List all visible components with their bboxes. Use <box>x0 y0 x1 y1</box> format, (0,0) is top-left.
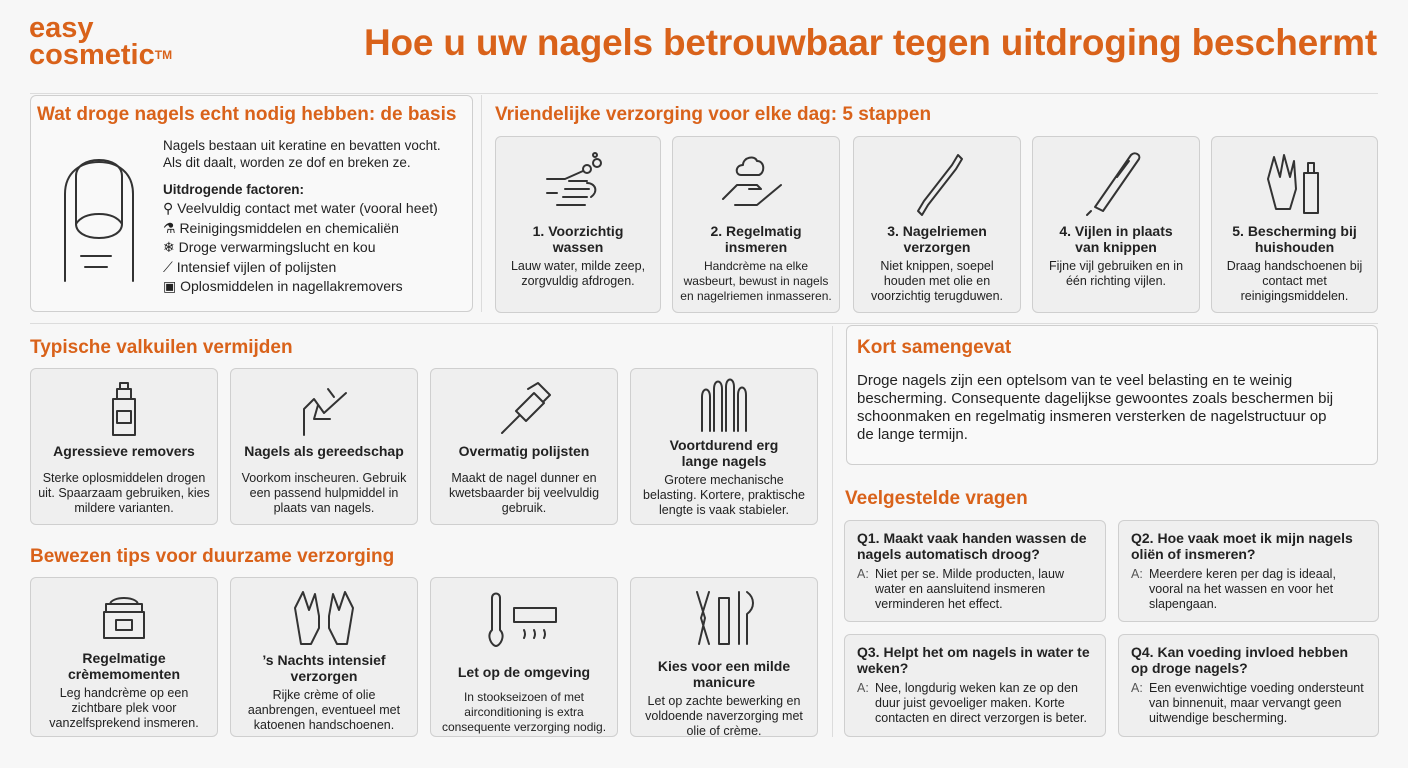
card: step 3 <box>853 136 1021 313</box>
card: step 1: wassen <box>553 239 603 255</box>
card: step 4: van knippen <box>1075 239 1157 255</box>
card: gereedschap: Voorkom inscheuren. Gebruik een passend hulpmiddel in plaats van nagels. <box>242 471 406 515</box>
text: basis: ❄ Droge verwarmingslucht en kou <box>163 239 376 255</box>
card: removers <box>30 368 218 525</box>
text: basis: Uitdrogende factoren: <box>163 182 304 197</box>
card: step 1: 1. Voorzichtig <box>533 223 623 239</box>
heading: 5 stappen: Vriendelijke verzorging voor elke dag: 5 stappen <box>495 104 931 125</box>
card: step 5: huishouden <box>1255 239 1334 255</box>
text: basis <box>163 138 441 294</box>
card: step 1: Lauw water, milde zeep, zorgvuldig afdrogen. <box>511 259 645 288</box>
card: crèmemomenten: Regelmatige <box>82 650 166 666</box>
logo: easy <box>29 12 94 44</box>
card: step 3: 3. Nagelriemen <box>887 223 987 239</box>
card: lange nagels: lange nagels <box>682 453 766 469</box>
faq: Q4: Een evenwichtige voeding ondersteunt van binnenuit, maar vervangt geen uitwendige bescherming. <box>1149 681 1364 725</box>
card: crèmemomenten: crèmemomenten <box>68 666 180 682</box>
faq: Q1: Niet per se. Milde producten, lauw water en aansluitend insmeren verminderen het effect. <box>875 567 1064 611</box>
card: step 3: verzorgen <box>904 239 970 255</box>
text: basis: ▣ Oplosmiddelen in nagellakremovers <box>163 278 403 294</box>
heading: tips: Bewezen tips voor duurzame verzorging <box>30 546 394 567</box>
text: basis: ⚗ Reinigingsmiddelen en chemicaliën <box>163 220 399 236</box>
faq: Q3: Q3. Helpt het om nagels in water te weken? <box>857 644 1090 676</box>
card: polijsten: Maakt de nagel dunner en kwetsbaarder bij veelvuldig gebruik. <box>449 471 599 515</box>
heading: basis: Wat droge nagels echt nodig hebben: de basis <box>37 104 456 125</box>
card: step 2 <box>672 136 840 313</box>
panel: basis <box>30 95 473 312</box>
text: basis: Nagels bestaan uit keratine en bevatten vocht. <box>163 138 441 153</box>
title: Hoe u uw nagels betrouwbaar tegen uitdroging beschermt <box>364 22 1377 63</box>
card: manicure: Let op zachte bewerking en voldoende naverzorging met olie of crème. <box>645 694 803 738</box>
text: samenvatting: Droge nagels zijn een optelsom van te veel belasting en te weinig bescherming. Consequente dagelijkse gewoontes zoals beschermen bij schoonmaken en regelmatig insmeren versterken de nagelstructuur op de lange termijn. <box>857 372 1333 443</box>
card: lange nagels: Voortdurend erg <box>670 437 778 453</box>
card: crèmemomenten: Leg handcrème op een zichtbare plek voor vanzelfsprekend insmeren. <box>49 686 199 730</box>
card: lange nagels: Grotere mechanische belasting. Kortere, praktische lengte is vaak stabieler. <box>643 473 805 517</box>
card: manicure: manicure <box>693 674 755 690</box>
faq: Q1: Q1. Maakt vaak handen wassen de nagels automatisch droog? <box>857 530 1087 562</box>
faq: Q3: A: <box>857 681 869 695</box>
card: omgeving: In stookseizoen of met airconditioning is extra consequente verzorging nodig. <box>442 690 606 734</box>
card: step 4: Fijne vijl gebruiken en in één richting vijlen. <box>1049 259 1183 288</box>
card: step 3: Niet knippen, soepel houden met olie en voorzichtig terugduwen. <box>871 259 1003 303</box>
card: removers: Agressieve removers <box>53 443 195 459</box>
card: polijsten: Overmatig polijsten <box>459 443 589 459</box>
card: omgeving: Let op de omgeving <box>458 664 590 680</box>
text: basis: Als dit daalt, worden ze dof en breken ze. <box>163 155 411 170</box>
heading: valkuilen: Typische valkuilen vermijden <box>30 337 293 358</box>
card: step 5: Draag handschoenen bij contact met reinigingsmiddelen. <box>1227 259 1362 303</box>
card: manicure: Kies voor een milde <box>658 658 790 674</box>
card: gereedschap <box>230 368 418 525</box>
card: 's nachts: Rijke crème of olie aanbrengen, eventueel met katoenen handschoenen. <box>248 688 400 732</box>
card: 's nachts: ’s Nachts intensief <box>262 652 386 668</box>
card: step 2: Handcrème na elke wasbeurt, bewust in nagels en nagelriemen inmasseren. <box>680 259 832 303</box>
faq: Q2: Meerdere keren per dag is ideaal, vooral na het wassen en voor het slapengaan. <box>1149 567 1336 611</box>
card: omgeving <box>430 577 618 737</box>
card: 's nachts: verzorgen <box>291 668 357 684</box>
card: step 1 <box>495 136 661 313</box>
faq: Q1: A: <box>857 567 869 581</box>
faq: Q4: Q4. Kan voeding invloed hebben op droge nagels? <box>1131 644 1348 676</box>
heading: faq: Veelgestelde vragen <box>845 488 1028 509</box>
icon: finger <box>64 159 134 282</box>
card: step 5: 5. Bescherming bij <box>1232 223 1357 239</box>
faq: Q4 <box>1118 634 1379 737</box>
card: 's nachts <box>230 577 418 737</box>
card: lange nagels <box>630 368 818 525</box>
card: step 5 <box>1211 136 1378 313</box>
text: basis: ⟋ Intensief vijlen of polijsten <box>163 258 336 274</box>
card: removers: Sterke oplosmiddelen drogen uit. Spaarzaam gebruiken, kies mildere varianten. <box>38 471 210 515</box>
card: step 4 <box>1032 136 1200 313</box>
faq: Q3 <box>844 634 1106 737</box>
logo <box>29 12 172 71</box>
card: manicure <box>630 577 818 737</box>
faq: Q1 <box>844 520 1106 622</box>
faq: Q2 <box>1118 520 1379 622</box>
card: step 2: insmeren <box>725 239 787 255</box>
faq: Q4: A: <box>1131 681 1143 695</box>
faq: Q2: Q2. Hoe vaak moet ik mijn nagels oliën of insmeren? <box>1131 530 1353 562</box>
card: gereedschap: Nagels als gereedschap <box>244 443 404 459</box>
card: step 2: 2. Regelmatig <box>710 223 802 239</box>
text: basis: ⚲ Veelvuldig contact met water (vooral heet) <box>163 200 438 216</box>
card: polijsten <box>430 368 618 525</box>
card: step 4: 4. Vijlen in plaats <box>1059 223 1173 239</box>
panel: samenvatting <box>846 325 1378 465</box>
logo: cosmeticTM <box>29 39 172 71</box>
faq: Q2: A: <box>1131 567 1143 581</box>
heading: samenvatting: Kort samengevat <box>857 337 1011 358</box>
faq: Q3: Nee, longdurig weken kan ze op den duur juist gevoeliger maken. Korte contacten en direct verzorgen is beter. <box>875 681 1087 725</box>
card: crèmemomenten <box>30 577 218 737</box>
